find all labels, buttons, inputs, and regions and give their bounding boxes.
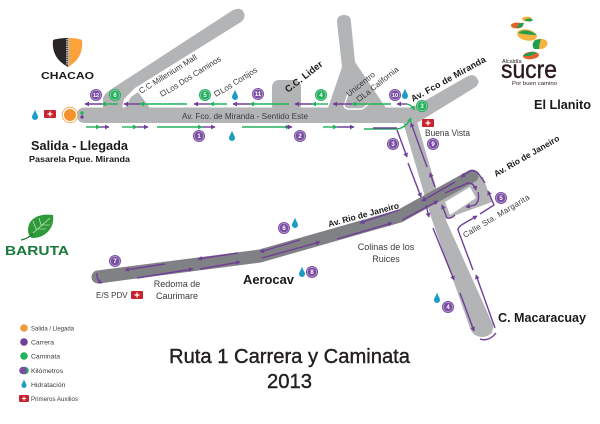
legend: carrera: Carrera (31, 340, 54, 346)
km 3 green (416, 100, 428, 112)
km 4: 4 (446, 305, 450, 311)
label: Calle Sta. Margarita: Calle Sta. Margarita (461, 193, 532, 240)
km 12 (90, 89, 102, 101)
km 6: 6 (282, 226, 286, 232)
km 5 (495, 192, 507, 204)
label: Av. Fco de Miranda: Av. Fco de Miranda (409, 54, 488, 104)
label: C.C Millenium Mall: C.C Millenium Mall (137, 53, 199, 96)
km 8: 8 (310, 270, 314, 276)
label: Buena Vista: Buena Vista (425, 128, 470, 138)
road: Av. Rio de Janeiro (98, 176, 472, 277)
label: avenue direction: Av. Fco. de Miranda - Sentido Este (182, 112, 309, 121)
legend: primeros auxilios: Primeros Auxilios (31, 396, 79, 403)
first aid kits (44, 110, 434, 299)
km 5: 5 (499, 196, 503, 202)
label: Av. Rio de Janeiro west: Av. Rio de Janeiro (327, 200, 400, 229)
km 3 (387, 138, 399, 150)
km 10 (389, 89, 401, 101)
logo: Chacao: CHACAO (41, 70, 94, 82)
route: carrera purple lines (85, 104, 496, 340)
km 4 green (315, 89, 327, 101)
label: Salida - Llegada: Salida - Llegada (31, 138, 129, 153)
km 1: 1 (197, 134, 201, 140)
km 6 green: 6 (113, 93, 117, 99)
road: north branch to La California (328, 15, 386, 108)
km 9 (427, 138, 439, 150)
km 5 green: 5 (203, 93, 207, 99)
km 8 (306, 266, 318, 278)
legend: hidratacion: Hidratación (31, 382, 66, 389)
legend: caminata: Caminata (31, 354, 60, 360)
label: E/S PDV: E/S PDV (96, 291, 128, 300)
label: Av. Rio de Janeiro east: Av. Rio de Janeiro (492, 133, 561, 179)
logo: Sucre (501, 17, 557, 87)
road: north-west branch (103, 9, 245, 108)
legend (19, 324, 79, 403)
road: C.C. Lider access (272, 80, 301, 112)
km 3 green: 3 (420, 104, 424, 110)
km 1 (193, 130, 205, 142)
km 2: 2 (298, 134, 302, 140)
label: Redoma de Caurimare: Caurimare (156, 291, 198, 301)
logo: Baruta (5, 215, 70, 258)
label: Los Cortijos: Los Cortijos (218, 65, 259, 96)
km 4 green: 4 (319, 93, 323, 99)
km 5 green (199, 89, 211, 101)
road: small wedge by Millennium (125, 92, 150, 108)
km 7 (109, 255, 121, 267)
km 2 (294, 130, 306, 142)
label: Los Dos Caminos: Los Dos Caminos (164, 54, 223, 96)
label: El Llanito: El Llanito (534, 98, 591, 112)
legend: salida / llegada: Salida / Llegada (31, 326, 74, 332)
km 7: 7 (113, 259, 117, 265)
hydration drops (32, 88, 440, 303)
label: Pasarela Pque. Miranda: Pasarela Pque. Miranda (29, 154, 130, 164)
road: triangle island outline (344, 94, 370, 109)
route: caminata green lines (86, 104, 414, 129)
km 4 (442, 301, 454, 313)
road: Av. Fco. de Miranda main (77, 75, 478, 123)
label: Aerocav: Aerocav (243, 273, 294, 287)
kilometre markers (90, 88, 507, 313)
place labels (29, 53, 591, 325)
title: Ruta 1 Carrera y Caminata (169, 346, 411, 368)
logo: Sucre: sucre (501, 56, 557, 84)
label: Redoma de Caurimare: Redoma de (154, 279, 200, 289)
km 9: 9 (431, 142, 435, 148)
label: Colinas de los Ruices: Ruices (372, 254, 400, 264)
road network (77, 9, 493, 337)
km 12: 12 (93, 93, 99, 99)
title: 2013 (267, 371, 312, 393)
logo: Chacao (41, 38, 94, 82)
km 3: 3 (391, 142, 395, 148)
km 11: 11 (255, 92, 262, 98)
label: La California: La California (360, 64, 401, 100)
label: Colinas de los Ruices: Colinas de los (358, 242, 415, 252)
label: C. Macaracuay: C. Macaracuay (498, 311, 586, 325)
km 6 (278, 222, 290, 234)
road: south branch to C. Macaracuay (403, 122, 493, 337)
label: Unicentro: Unicentro (345, 70, 377, 99)
title (169, 346, 411, 393)
km 10: 10 (392, 93, 398, 99)
logo: Baruta: BARUTA (5, 243, 70, 258)
logo: Sucre: Por buen camino (512, 81, 557, 87)
km 6 green (109, 89, 121, 101)
label: C.C. Lider: C.C. Lider (283, 59, 325, 95)
km 11 (252, 88, 264, 100)
start and finish marker (62, 107, 84, 123)
legend: kilometros: Kilómetros (31, 368, 64, 375)
logo: Sucre: Alcaldía (502, 59, 523, 65)
road: Calle Sta. Margarita loop (435, 174, 492, 219)
